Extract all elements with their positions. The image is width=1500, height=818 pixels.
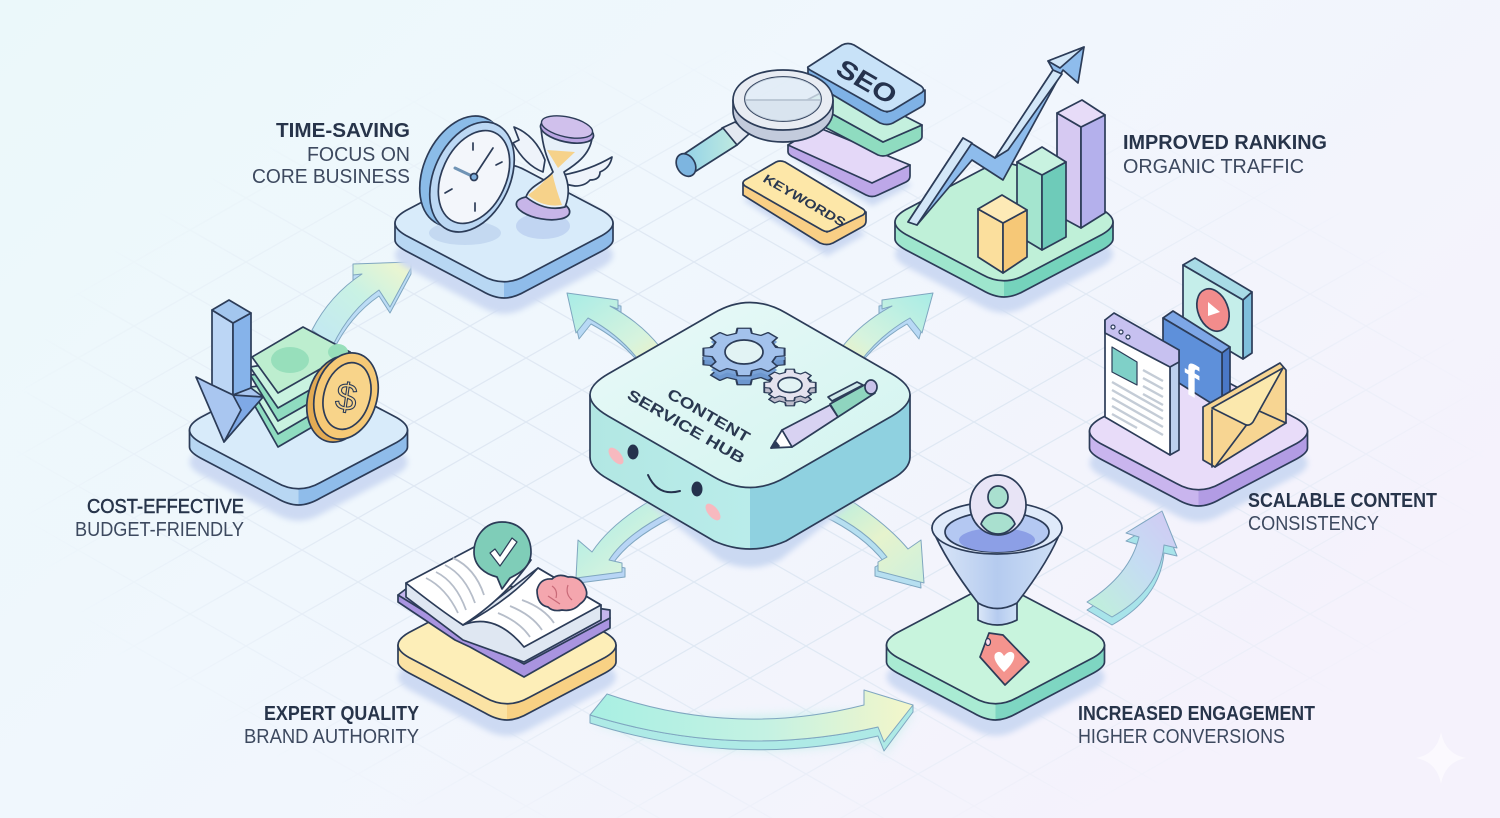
icon: open book xyxy=(398,545,610,677)
purple bar xyxy=(1057,100,1105,228)
platform: scalable content xyxy=(1090,372,1308,522)
label: time-saving: TIME-SAVING xyxy=(276,120,410,142)
arrow: cost-effective to time-saving xyxy=(312,262,411,351)
icon: envelope xyxy=(1203,363,1286,467)
label: time-saving xyxy=(252,120,410,188)
label: improved ranking: ORGANIC TRAFFIC xyxy=(1123,156,1304,178)
arrow: hub to improved ranking xyxy=(839,293,933,368)
label: cost-effective: BUDGET-FRIENDLY xyxy=(75,519,244,541)
label: cost-effective xyxy=(75,496,244,541)
arrow: increased engagement to scalable content xyxy=(1087,511,1177,625)
icon: pen xyxy=(771,380,877,448)
icon: check bubble xyxy=(474,522,531,589)
label: improved ranking xyxy=(1123,132,1327,178)
icon: heart price tag xyxy=(980,633,1029,685)
label: increased engagement: INCREASED ENGAGEMENT xyxy=(1078,703,1315,725)
icon: video card xyxy=(1183,258,1252,359)
platform: time-saving xyxy=(395,164,613,314)
hub title text: CONTENT xyxy=(664,385,753,446)
label: scalable content: SCALABLE CONTENT xyxy=(1248,490,1437,512)
label: time-saving: FOCUS ON xyxy=(307,144,410,166)
arrow: hub to expert quality xyxy=(576,502,671,583)
hub face: eyes, smile and cheeks xyxy=(606,444,723,523)
arrow: hub to time-saving xyxy=(567,293,663,368)
icon: funnel with person token xyxy=(932,475,1062,625)
sparkle watermark xyxy=(1416,732,1466,784)
hub: content service hub box xyxy=(590,302,910,568)
green bar xyxy=(1017,147,1066,250)
icon: brain xyxy=(537,575,587,611)
platform: increased engagement xyxy=(886,586,1104,736)
icon: dollar coin: $ xyxy=(333,376,360,420)
icon: facebook card xyxy=(1163,311,1230,411)
label: increased engagement xyxy=(1078,703,1315,748)
label: expert quality: EXPERT QUALITY xyxy=(264,703,420,725)
growth arrow xyxy=(908,47,1084,225)
icon: browser page xyxy=(1105,313,1179,455)
icon: downward arrow xyxy=(196,300,263,442)
arrow: hub to increased engagement xyxy=(823,500,924,588)
label: expert quality xyxy=(244,703,420,748)
bar chart with growth arrow xyxy=(908,47,1105,273)
platform: cost-effective xyxy=(190,371,408,521)
icon: clock xyxy=(403,102,531,246)
hub title text: SERVICE HUB xyxy=(624,386,748,467)
label: improved ranking: IMPROVED RANKING xyxy=(1123,132,1327,154)
platform: improved ranking xyxy=(895,163,1113,313)
icon: dollar coin xyxy=(297,345,388,450)
icon: keywords plate: KEYWORDS xyxy=(760,172,848,230)
icon: seo stacked plates xyxy=(788,44,925,206)
label: cost-effective: COST-EFFECTIVE xyxy=(87,496,244,518)
label: scalable content xyxy=(1248,490,1437,535)
arrow: expert quality to increased engagement xyxy=(590,690,913,755)
icon: facebook card: f xyxy=(1184,351,1200,411)
yellow bar xyxy=(978,195,1027,273)
icon: magnifying glass xyxy=(672,70,833,180)
platform: expert quality xyxy=(398,586,616,736)
label: scalable content: CONSISTENCY xyxy=(1248,513,1379,535)
label: increased engagement: HIGHER CONVERSIONS xyxy=(1078,726,1285,748)
icon: winged hourglass xyxy=(513,112,612,239)
icon: gears xyxy=(703,328,816,406)
icon: seo stacked plates: SEO xyxy=(831,54,903,110)
icon: money stack xyxy=(250,327,350,447)
label: expert quality: BRAND AUTHORITY xyxy=(244,726,419,748)
label: time-saving: CORE BUSINESS xyxy=(252,166,410,188)
icon: keywords plate xyxy=(743,161,866,256)
